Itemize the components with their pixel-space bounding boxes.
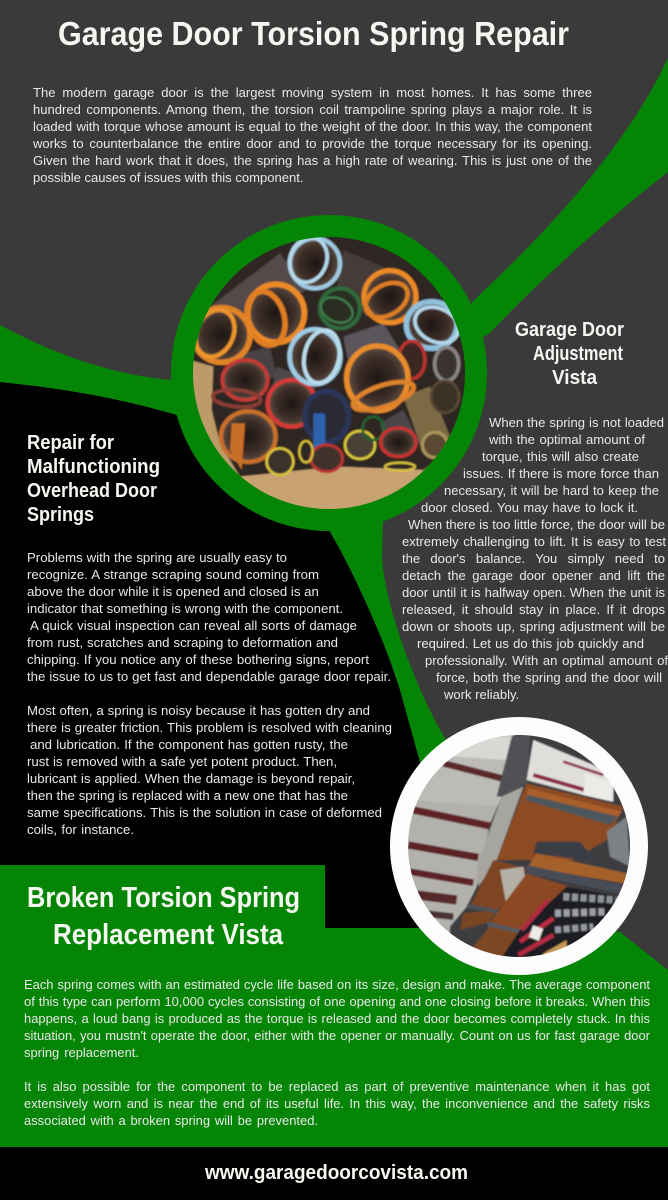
text block: broken spring replacement: associated with a broken spring will be prevented.: [24, 1113, 318, 1128]
text block: spring adjustment: necessary, it will be hard to keep the: [444, 483, 659, 498]
text block: spring problems and repair: above the door while it is opened and closed is an: [27, 584, 319, 599]
text block: broken spring replacement: It is also possible for the component to be replaced as part of preventive maintenance when it has got: [24, 1079, 650, 1094]
heading: repair for malfunctioning springs: [27, 432, 160, 526]
text block: spring adjustment: door until it is halfway open. When the unit is: [402, 585, 665, 600]
heading: garage door adjustment: Garage Door: [515, 319, 624, 341]
text block: spring adjustment: When there is too little force, the door will be: [408, 517, 665, 532]
text block: spring problems and repair: indicator that something is wrong with the component.: [27, 601, 343, 616]
panel: bottom green section: [0, 865, 668, 1147]
text block: spring adjustment: professionally. With an optimal amount of: [425, 653, 668, 668]
text block: spring adjustment: down or shoots up, spring adjustment will be: [402, 619, 665, 634]
text block: introduction: [33, 85, 592, 185]
heading: broken torsion spring replacement: Broken Torsion Spring: [27, 882, 300, 914]
text block: broken spring replacement: of this type can perform 10,000 cycles consisting of one opening and one closing before it breaks. When this: [24, 994, 650, 1009]
heading: repair for malfunctioning springs: Overhead Door: [27, 480, 157, 502]
text block: broken spring replacement: Each spring comes with an estimated cycle life based on its size, design and make. The average component: [24, 977, 650, 992]
text block: spring problems and repair: chipping. If you notice any of these bothering signs, report: [27, 652, 369, 667]
photo: warehouse shelves in white circle: [390, 717, 648, 975]
heading: repair for malfunctioning springs: Springs: [27, 504, 94, 526]
text block: spring problems and repair: then the spring is replaced with a new one that has the: [27, 788, 348, 803]
heading: repair for malfunctioning springs: Repair for: [27, 432, 114, 454]
text block: spring problems and repair: and lubrication. If the component has gotten rusty, the: [30, 737, 348, 752]
text block: introduction: Given the hard work that it does, the spring has a high rate of wearing. This is just one of the: [33, 153, 592, 168]
title: Garage Door Torsion Spring Repair: [58, 15, 569, 52]
text block: introduction: possible causes of issues with this component.: [33, 170, 304, 185]
text block: spring problems and repair: A quick visual inspection can reveal all sorts of damage: [30, 618, 357, 633]
text block: spring adjustment: required. Let us do this job quickly and: [417, 636, 644, 651]
text block: spring problems and repair: from rust, scratches and scraping to deformation and: [27, 635, 338, 650]
text block: spring problems and repair: coils, for instance.: [27, 822, 134, 837]
text block: spring problems and repair: the issue to us to get fast and dependable garage door repair.: [27, 669, 391, 684]
text block: spring adjustment: door closed. You may have to lock it.: [421, 500, 638, 515]
text block: spring adjustment: work reliably.: [444, 687, 519, 702]
text block: spring adjustment: extremely challenging to lift. It is easy to test: [402, 534, 666, 549]
text block: spring adjustment: force, both the spring and the door will: [436, 670, 662, 685]
text block: spring adjustment: [402, 415, 668, 702]
text block: broken spring replacement: [24, 977, 650, 1128]
text block: spring problems and repair: rust is removed with a safe yet potent product. Then,: [27, 754, 337, 769]
text block: spring adjustment: released, it should stay in place. If it drops: [402, 602, 665, 617]
photo: torsion springs in green circle: [171, 215, 487, 531]
panel: black section: [0, 382, 450, 932]
heading: repair for malfunctioning springs: Malfunctioning: [27, 456, 160, 478]
text block: introduction: The modern garage door is the largest moving system in most homes. It has some three: [33, 85, 592, 100]
swoosh: top right green band: [470, 58, 668, 345]
text block: introduction: hundred components. Among them, the torsion coil trampoline spring plays a major role. It is: [33, 102, 592, 117]
swoosh: left green band: [0, 325, 200, 420]
spring rings: [290, 238, 340, 288]
panel: black footer bar: [0, 1147, 668, 1200]
text block: broken spring replacement: extensively worn and is near the end of its useful life. In this way, the inconvenience and the safety risks: [24, 1096, 650, 1111]
text block: spring problems and repair: Most often, a spring is noisy because it has gotten dry and: [27, 703, 370, 718]
heading: garage door adjustment: Vista: [552, 367, 598, 389]
text block: spring problems and repair: lubricant is applied. When the damage is beyond repair,: [27, 771, 355, 786]
text block: spring problems and repair: Problems with the spring are usually easy to: [27, 550, 287, 565]
swoosh: center green band: [330, 500, 470, 800]
text block: spring adjustment: the door's balance. You simply need to: [402, 551, 665, 566]
heading: garage door adjustment: [515, 319, 624, 389]
text block: spring adjustment: with the optimal amount of: [489, 432, 645, 447]
text block: spring adjustment: issues. If there is more force than: [463, 466, 659, 481]
text block: spring problems and repair: recognize. A strange scraping sound coming from: [27, 567, 319, 582]
text block: spring adjustment: detach the garage door opener and lift the: [402, 568, 665, 583]
text block: introduction: loaded with torque whose amount is equal to the weight of the door. In this way, the component: [33, 119, 592, 134]
text block: broken spring replacement: situation, you mustn't operate the door, either with the opener or manually. Count on us for fast garage door: [24, 1028, 650, 1043]
text block: spring adjustment: torque, this will also create: [482, 449, 639, 464]
text block: spring problems and repair: there is greater friction. This problem is resolved with cleaning: [27, 720, 392, 735]
text block: broken spring replacement: happens, a loud bang is produced as the torque is released and the door becomes completely stuck. In this: [24, 1011, 650, 1026]
text block: spring problems and repair: [27, 550, 392, 837]
text block: spring problems and repair: same specifications. This is the solution in case of deformed: [27, 805, 382, 820]
text block: spring adjustment: When the spring is not loaded: [489, 415, 664, 430]
footer website address: www.garagedoorcovista.com: [204, 1162, 468, 1184]
text block: broken spring replacement: spring replacement.: [24, 1045, 139, 1060]
text block: introduction: works to counterbalance the entire door and to provide the torque necessary for its opening.: [33, 136, 592, 151]
heading: broken torsion spring replacement: Replacement Vista: [53, 919, 284, 951]
heading: broken torsion spring replacement: [27, 882, 300, 951]
heading: garage door adjustment: Adjustment: [533, 343, 623, 365]
